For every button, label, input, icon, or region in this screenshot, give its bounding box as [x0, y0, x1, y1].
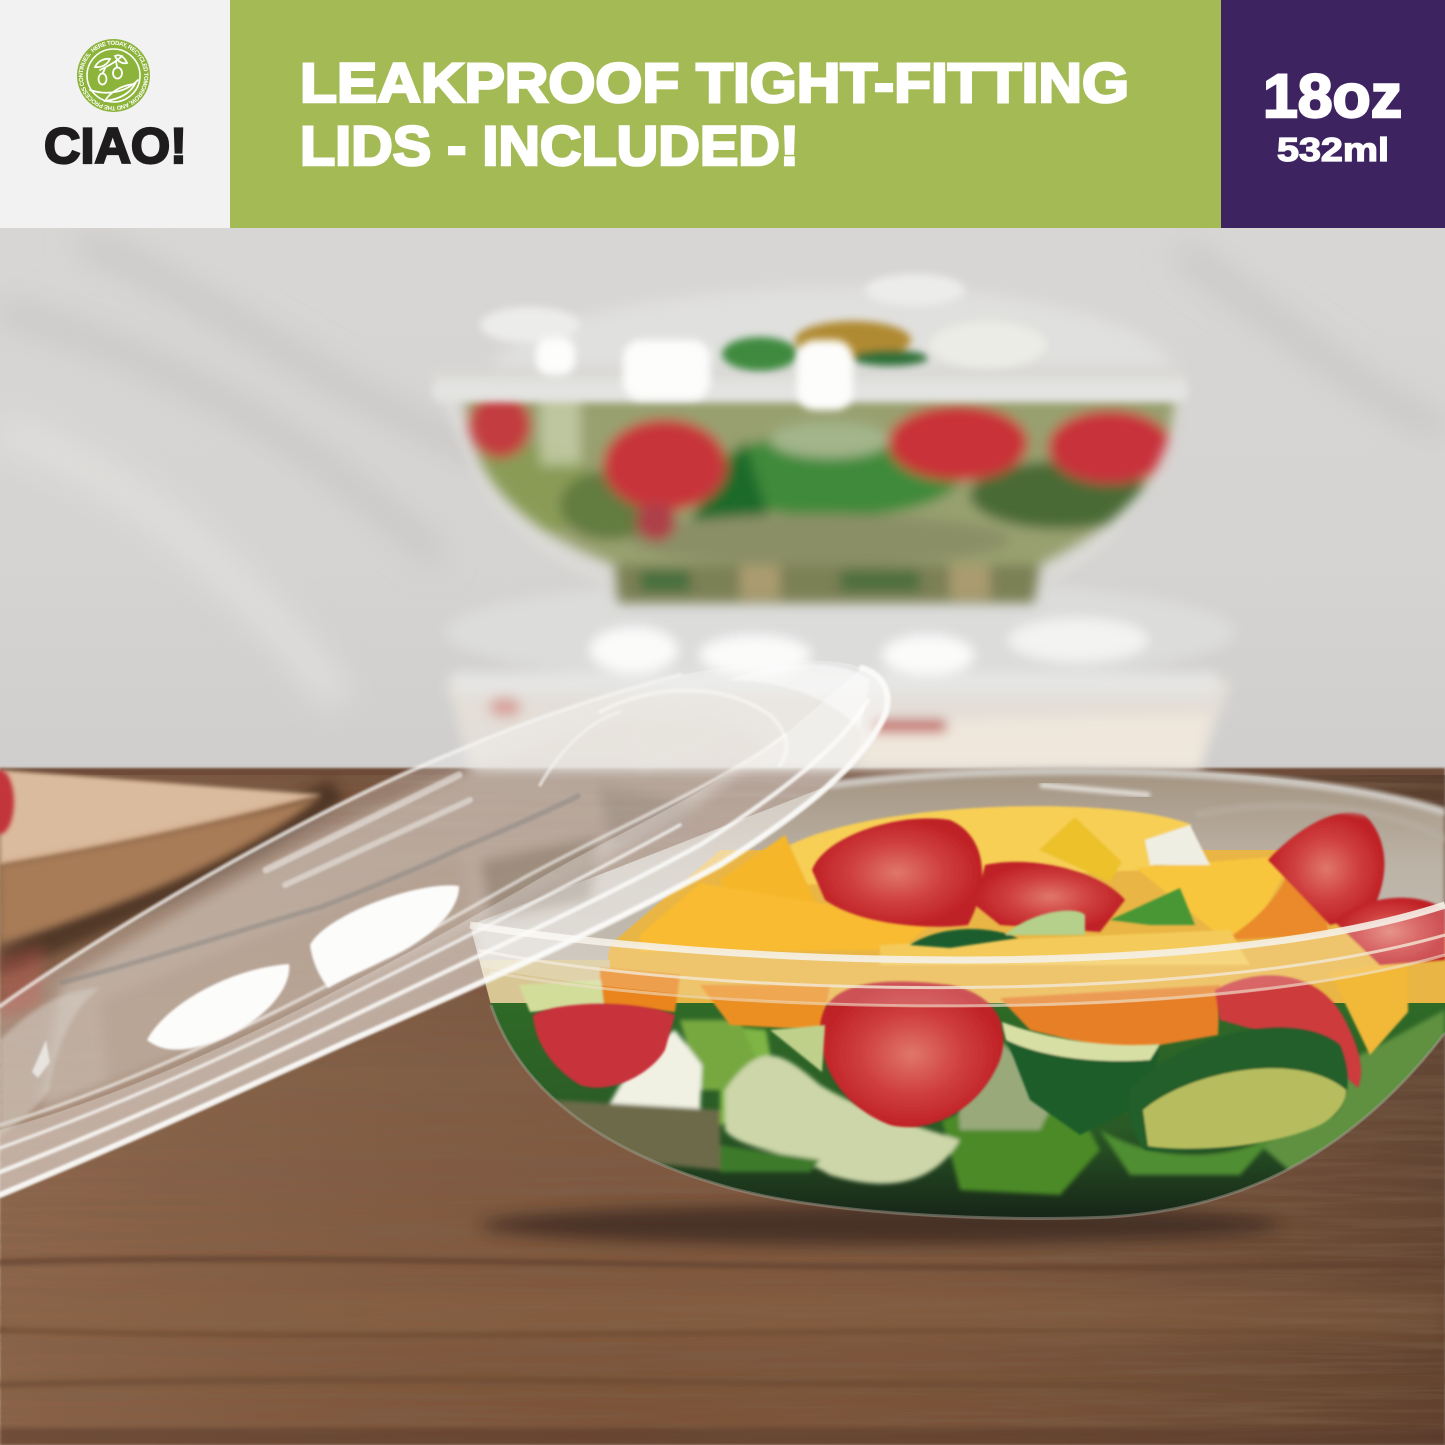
clear plastic lid leaning on bowl — [0, 661, 888, 1195]
lid upper ribs — [0, 675, 787, 1006]
header: purple size badge — [1221, 0, 1445, 228]
lid dome shading — [0, 690, 770, 1120]
lid grey dome edge — [60, 795, 580, 983]
salad: oranges and peppers — [519, 806, 1408, 1055]
title text — [300, 51, 1129, 177]
salad: lettuce and greens — [550, 1000, 1445, 1195]
cutting board at left — [0, 770, 345, 975]
glass interior — [470, 765, 1445, 975]
lid lower rim band — [0, 668, 888, 1195]
lower stacked bowl — [445, 577, 1235, 770]
header: logo panel — [0, 0, 230, 228]
salad: cucumbers — [770, 888, 1348, 1152]
size text — [1263, 62, 1402, 168]
title text: LEAKPROOF TIGHT-FITTING — [300, 51, 1129, 114]
upper bowl salad — [450, 385, 1190, 615]
bowl rims — [470, 771, 1445, 1218]
rear stacked bowl with salad — [430, 274, 1235, 770]
salad: tomatoes — [533, 812, 1445, 1127]
title text: LIDS - INCLUDED! — [300, 114, 799, 177]
upper bowl lid — [490, 287, 1176, 368]
lid highlights — [32, 885, 459, 1078]
upper bowl glass — [430, 372, 1188, 590]
header: green title banner — [230, 0, 1221, 228]
size text: 532ml — [1277, 131, 1389, 168]
size text: 18oz — [1263, 62, 1402, 130]
logo wordmark: CIAO! — [44, 118, 187, 174]
front glass bowl with salad — [470, 765, 1445, 1228]
bowl front band glass — [470, 905, 1445, 1007]
icon: olive branch badge: HERE TODAY, RECYCLED TOMORROW, AND THE PROCESS CONTINUES. — [78, 40, 148, 110]
